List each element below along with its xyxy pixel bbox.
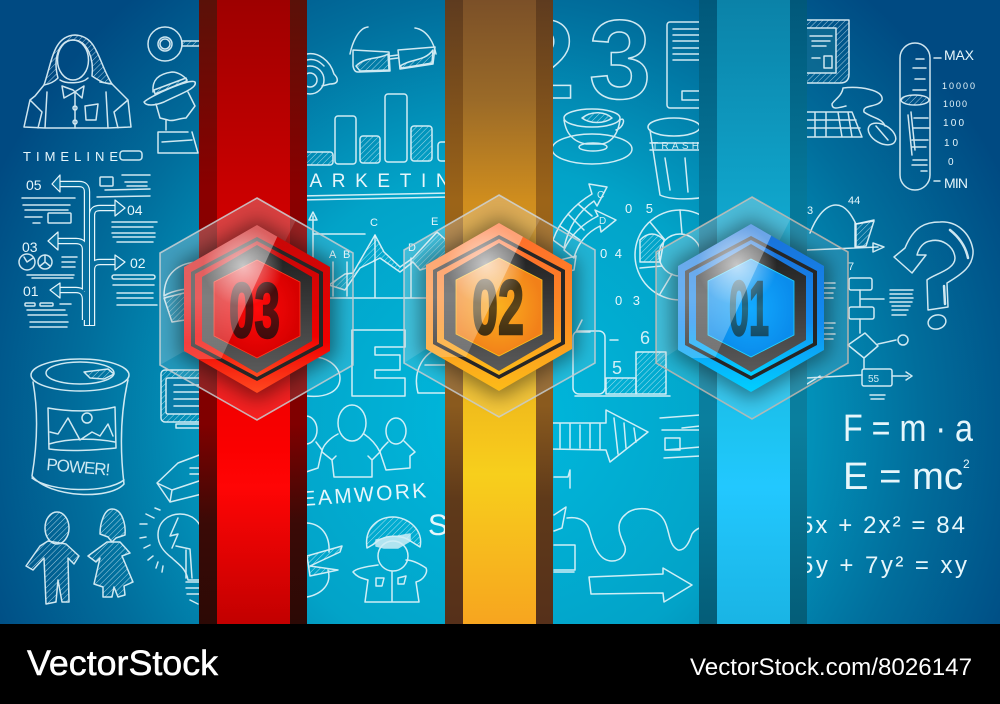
doodle: numbered labels bbox=[600, 201, 653, 308]
doodle: trash bin: TRASH bbox=[652, 141, 699, 152]
doodle: thermometer: 1000 bbox=[943, 99, 967, 109]
doodle: teamwork heading: TEAMWORK bbox=[286, 479, 427, 512]
doodle: timeline arrows: 04 bbox=[127, 202, 143, 218]
doodle: outlined arrow bbox=[589, 568, 692, 602]
blue stripe bbox=[699, 0, 807, 624]
doodle: curved arrows: D bbox=[599, 216, 606, 227]
doodle: teamwork people bbox=[295, 405, 415, 477]
emblem glare 03 bbox=[184, 225, 280, 359]
doodle: webcam fragment bbox=[296, 54, 337, 94]
doodle: thermometer: 100 bbox=[943, 118, 964, 129]
doodle: numbered labels: 04 bbox=[600, 246, 622, 261]
doodle: thermometer bbox=[900, 43, 975, 191]
glass reflection 03 bbox=[160, 198, 296, 365]
doodle: light bulb bbox=[140, 508, 202, 604]
badge shadow 02 bbox=[420, 217, 578, 399]
doodle: big hatched arrow bbox=[550, 410, 700, 462]
orange stripe bbox=[445, 0, 553, 624]
doodle: line chart: E bbox=[431, 216, 438, 228]
doodle: large numbers 2 and 3 bbox=[513, 0, 651, 122]
doodle: shapes under the orange badge bbox=[416, 320, 670, 396]
doodle: man with hat bbox=[144, 72, 198, 153]
doodle: man with sunglasses bbox=[353, 517, 427, 602]
doodle: woman portrait bbox=[24, 35, 131, 128]
doodle: curved arrows: C bbox=[597, 190, 604, 201]
doodle: question mark bbox=[894, 222, 973, 331]
doodle: physics equations: F = m · a bbox=[843, 408, 974, 450]
doodle: eraser bbox=[157, 454, 202, 502]
doodle: physics equations: 2 bbox=[963, 457, 970, 471]
doodle: document bbox=[667, 22, 707, 108]
doodle: large numbers 2 and 3: 2 bbox=[513, 0, 575, 122]
doodle: pie chart bbox=[635, 210, 725, 300]
doodle: cable and mouse bbox=[832, 88, 899, 149]
doodle: power can bbox=[31, 359, 129, 494]
glass hexagon 02 bbox=[404, 195, 595, 417]
doodle: small monitor bbox=[161, 370, 206, 428]
glass hexagon 03 bbox=[160, 198, 353, 420]
doodle: trash bin bbox=[648, 118, 708, 199]
doodle: target disc with handle bbox=[148, 27, 200, 61]
watermark logo text: VectorStock bbox=[27, 644, 219, 683]
doodle: bell curve bbox=[807, 195, 884, 273]
doodle: thermometer: 0 bbox=[948, 157, 954, 168]
doodle: bell curve: 44 bbox=[848, 195, 860, 207]
doodle: physics equations: 5y + 7y² = xy bbox=[800, 552, 967, 579]
doodle: physics equations bbox=[800, 408, 974, 579]
hexagon emblem 01 bbox=[678, 224, 824, 392]
doodle: glasses bbox=[350, 27, 436, 72]
doodle: shapes under the orange badge: 5 bbox=[612, 358, 622, 378]
doodle: bell curve: 3 bbox=[807, 205, 813, 217]
doodle: line chart bbox=[300, 212, 450, 298]
doodle: computer and keyboard bbox=[800, 20, 862, 137]
doodle: power can: POWER! bbox=[46, 455, 111, 480]
doodle: helmet fragment bbox=[307, 523, 342, 597]
doodle: block letter E bbox=[307, 330, 405, 396]
doodle: flow chart bbox=[806, 278, 913, 399]
doodle: boy and girl figures bbox=[26, 509, 133, 604]
doodle: timeline arrows: 05 bbox=[26, 177, 42, 193]
doodle: physics equations: E = mc bbox=[843, 456, 963, 498]
doodle: thermometer: 10000 bbox=[942, 81, 975, 91]
badge shadow 01 bbox=[672, 218, 830, 400]
glass hexagon 01 bbox=[656, 197, 848, 419]
badge shadow 03 bbox=[178, 219, 336, 401]
doodle: timeline arrows: 01 bbox=[23, 283, 39, 299]
glass reflection 01 bbox=[656, 197, 790, 363]
doodle: numbered labels: 05 bbox=[625, 201, 653, 216]
doodle: marketing heading: MARKETING bbox=[284, 171, 474, 192]
doodle: line chart: B bbox=[343, 249, 350, 261]
doodle: line chart: C bbox=[370, 217, 378, 229]
doodle: helmet under glass bbox=[164, 262, 200, 322]
hexagon emblem 01: 01 bbox=[729, 266, 769, 352]
doodle: timeline text lines bbox=[19, 175, 157, 327]
doodle: thermometer: MAX bbox=[944, 47, 975, 63]
doodle: curved arrows bbox=[552, 184, 616, 275]
doodle: line chart: A bbox=[329, 249, 337, 261]
badge 02 bbox=[404, 195, 595, 417]
doodle: thermometer: MIN bbox=[944, 175, 968, 191]
number 02: 02 bbox=[472, 265, 524, 351]
badge 01 bbox=[656, 197, 848, 419]
doodle: timeline arrows: 03 bbox=[22, 239, 38, 255]
doodle: timeline arrows: 02 bbox=[130, 255, 146, 271]
watermark url text: VectorStock.com/8026147 bbox=[690, 654, 972, 681]
doodle: squiggle line bbox=[554, 470, 708, 572]
doodle: large numbers 2 and 3: 3 bbox=[589, 0, 651, 122]
emblem glare 01 bbox=[678, 224, 774, 358]
doodle: shapes under the orange badge: 6 bbox=[640, 328, 650, 348]
number 03: 03 bbox=[229, 268, 280, 354]
doodle: bar chart bbox=[300, 94, 452, 165]
emblem glare 02 bbox=[426, 223, 524, 357]
watermark band bbox=[0, 624, 1000, 704]
hexagon emblem 02 bbox=[426, 223, 572, 391]
doodle: coffee cup bbox=[552, 109, 632, 164]
glass reflection 02 bbox=[404, 195, 541, 363]
doodle: flow chart: 55 bbox=[868, 374, 880, 385]
badge 03 bbox=[160, 198, 353, 420]
hexagon emblem 03 bbox=[184, 225, 330, 393]
doodle: timeline arrows bbox=[22, 175, 146, 326]
doodle: line chart: D bbox=[408, 242, 416, 254]
doodle: bell curve: 7 bbox=[848, 261, 854, 273]
doodle: timeline heading: TIMELINE bbox=[23, 149, 118, 164]
doodle: thermometer: 10 bbox=[944, 138, 958, 149]
doodle: letter S fragment: S bbox=[428, 509, 448, 542]
red stripe bbox=[199, 0, 307, 624]
doodle: physics equations: 5x + 2x² = 84 bbox=[800, 512, 965, 539]
doodle: numbered labels: 03 bbox=[615, 293, 640, 308]
